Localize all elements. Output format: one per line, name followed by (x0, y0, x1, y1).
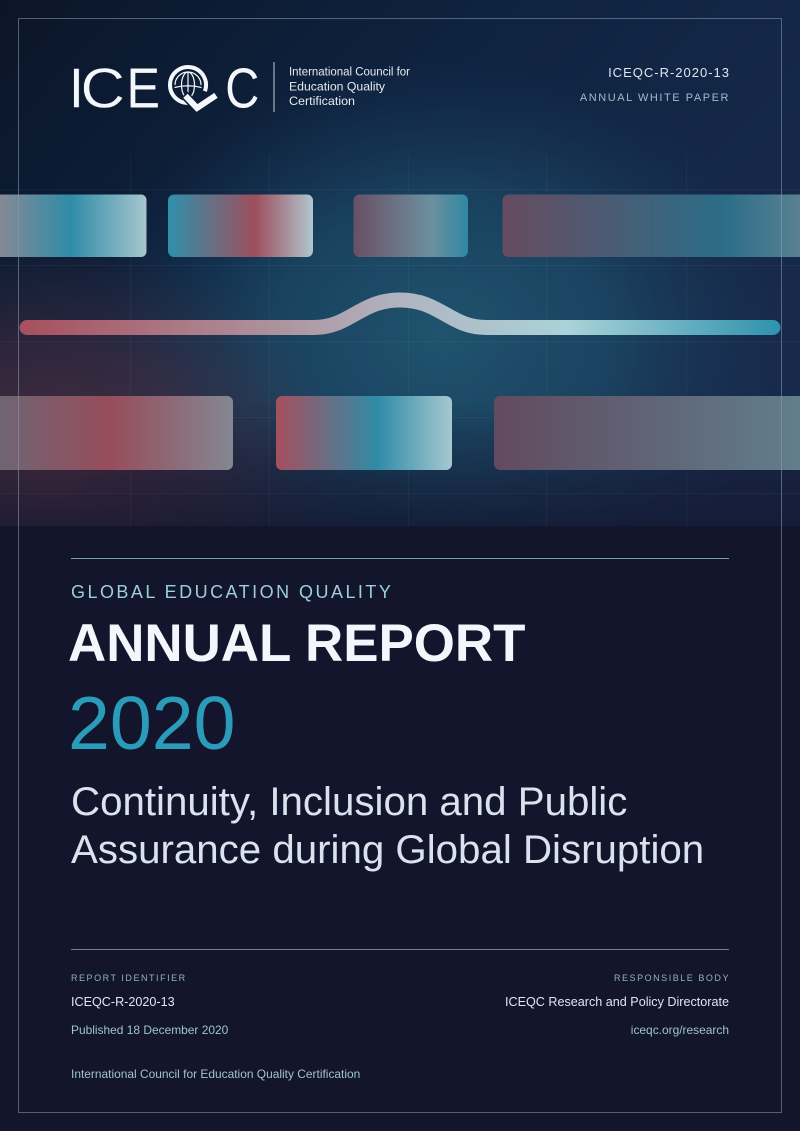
upper rule (71, 558, 729, 559)
logo wordmark (68, 56, 259, 120)
footer left: report identifier: REPORT IDENTIFIER (71, 973, 187, 983)
report code header: ANNUAL WHITE PAPER (580, 92, 730, 104)
logo wordmark: I (68, 56, 84, 120)
footer right: responsible body: iceqc.org/research (631, 1023, 729, 1037)
subtitle (71, 779, 704, 872)
flow ribbon with disruption bump (27, 300, 773, 328)
footer left: report identifier (71, 973, 229, 1037)
logo wordmark: C (80, 56, 125, 120)
lower rule (71, 949, 729, 950)
footer right: responsible body (505, 973, 730, 1037)
top row of gradient bars (0, 194, 800, 257)
report code header: ICEQC-R-2020-13 (608, 65, 730, 80)
main title: ANNUAL REPORT (68, 614, 525, 673)
bottom row of gradient bars (0, 396, 800, 470)
logo organisation name (289, 64, 410, 108)
logo organisation name: Certification (289, 94, 355, 108)
logo wordmark: C (225, 56, 259, 120)
hero artwork panel (0, 0, 800, 526)
logo organisation name: International Council for (289, 64, 410, 78)
subtitle: Assurance during Global Disruption (71, 827, 704, 872)
footer right: responsible body: RESPONSIBLE BODY (614, 973, 730, 983)
footer left: report identifier: Published 18 December 2020 (71, 1023, 229, 1037)
logo organisation name: Education Quality (289, 80, 386, 94)
subtitle: Continuity, Inclusion and Public (71, 779, 627, 824)
report code header (580, 65, 730, 104)
footer organisation line: International Council for Education Quality Certification (71, 1067, 360, 1081)
year: 2020 (68, 681, 236, 765)
ICEQC logo (68, 56, 410, 120)
logo divider (274, 62, 275, 112)
logo wordmark: E (126, 56, 160, 120)
footer right: responsible body: ICEQC Research and Policy Directorate (505, 995, 729, 1009)
icon: globe with check mark (170, 67, 214, 108)
kicker heading: GLOBAL EDUCATION QUALITY (71, 582, 393, 602)
footer left: report identifier: ICEQC-R-2020-13 (71, 995, 175, 1009)
